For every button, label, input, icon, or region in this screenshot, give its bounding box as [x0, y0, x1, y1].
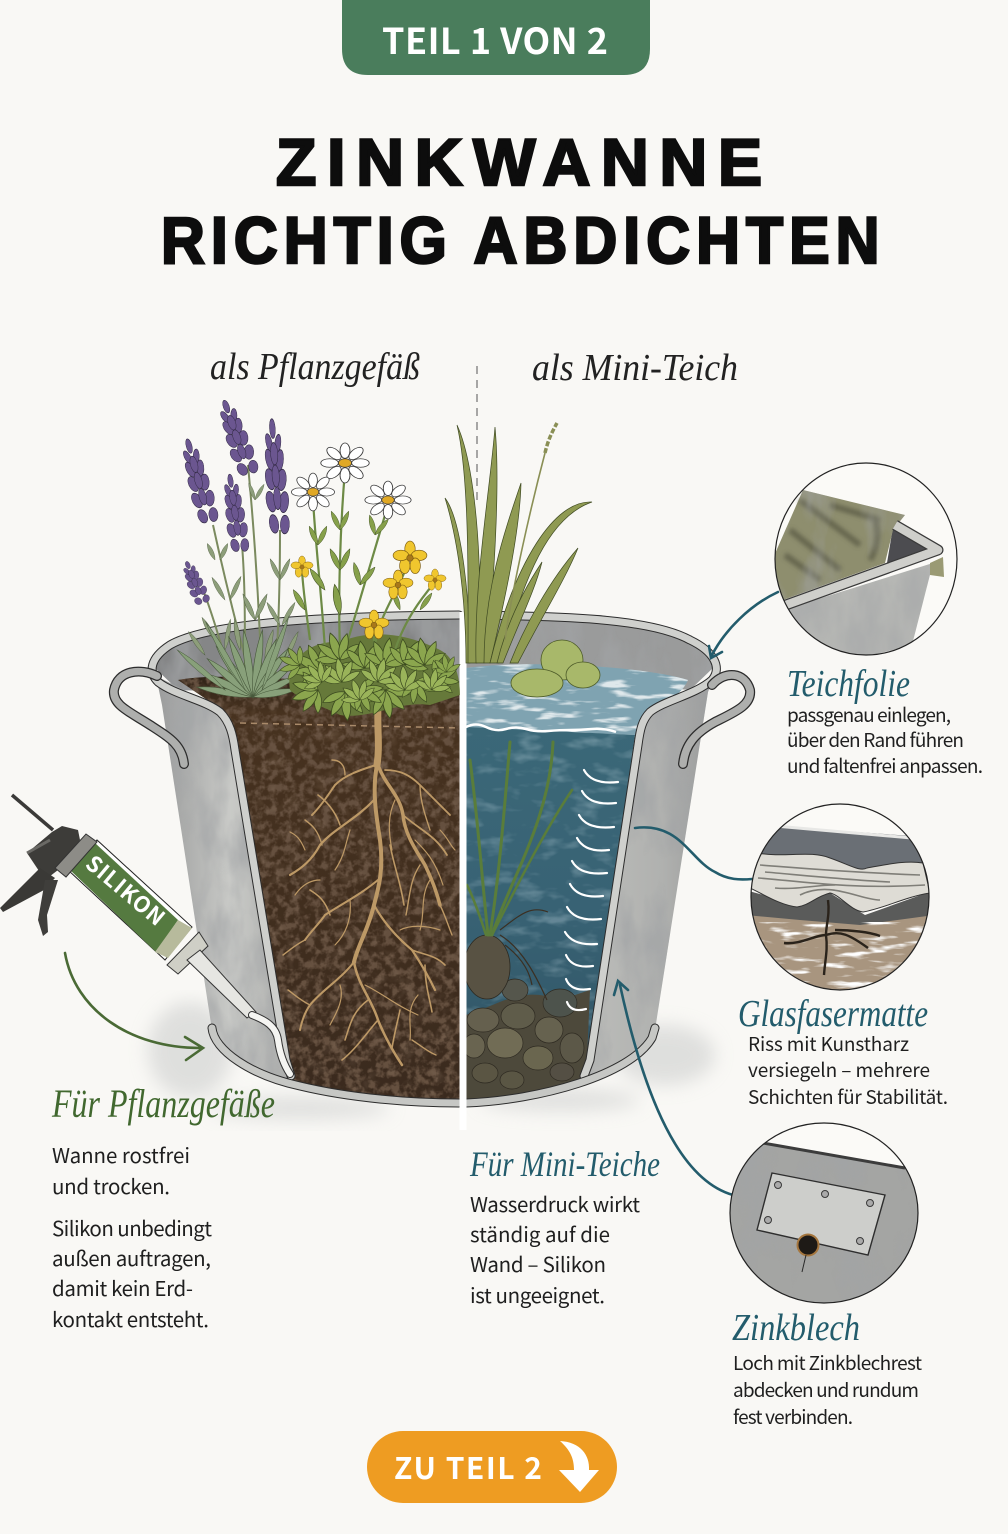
text block: Für Pflanzgefäße: damit kein Erd-: [52, 1272, 193, 1302]
cartridge: [55, 834, 208, 974]
tub outer walls: [158, 620, 709, 1078]
label: Glasfasermatte: [738, 993, 948, 1110]
label: Zinkblech: [732, 1307, 922, 1430]
plants: pond grass: [445, 425, 592, 663]
text block: Für Pflanzgefäße: Für Pflanzgefäße: [51, 1081, 275, 1126]
roots: [283, 706, 455, 1065]
text block: Für Pflanzgefäße: außen auftragen,: [52, 1242, 211, 1272]
inset: Teichfolie: [774, 462, 958, 656]
label: Glasfasermatte: Riss mit Kunstharz: [748, 1030, 909, 1057]
lily pads: [511, 640, 600, 697]
icon: down arrow: [559, 1441, 599, 1492]
text block: Für Pflanzgefäße: Wanne rostfrei: [52, 1139, 190, 1169]
title: RICHTIG ABDICHTEN: [161, 205, 880, 278]
plants: daisies and buttercups: [273, 443, 467, 723]
label: Glasfasermatte: Schichten für Stabilität.: [748, 1083, 948, 1110]
tub rim and cut edges: [152, 615, 716, 1103]
text block: Für Mini-Teiche: [469, 1144, 660, 1309]
ground shadow: [148, 1002, 715, 1119]
zinc tub cutaway illustration: [114, 600, 750, 1130]
title: ZINKWANNE: [276, 125, 762, 199]
arrow: Teichfolie: [709, 592, 778, 658]
text block: Für Mini-Teiche: ist ungeeignet.: [470, 1279, 605, 1309]
water pressure arcs: [565, 770, 618, 1010]
button: zu Teil 2: [367, 1431, 617, 1503]
text block: Für Pflanzgefäße: [51, 1081, 275, 1333]
nozzle and silicone bead: [187, 950, 290, 1074]
text block: Für Pflanzgefäße: und trocken.: [52, 1170, 170, 1200]
label: Teichfolie: [787, 663, 983, 779]
seed stem: [505, 423, 557, 640]
arrow: Glasfasermatte: [635, 827, 752, 879]
pebbles: [463, 979, 590, 1105]
label: Zinkblech: fest verbinden.: [733, 1403, 853, 1430]
handle left: [114, 672, 184, 764]
label: Zinkblech: Zinkblech: [732, 1307, 860, 1349]
water body: [466, 727, 635, 1098]
text block: Für Mini-Teiche: Wand – Silikon: [470, 1248, 606, 1278]
label: Zinkblech: abdecken und rundum: [733, 1376, 919, 1403]
cartridge: SILIKON: [80, 847, 173, 933]
text block: Für Pflanzgefäße: kontakt entsteht.: [52, 1303, 209, 1333]
caulk gun with silicone cartridge: [0, 795, 290, 1074]
right column heading: als Mini-Teich: [532, 347, 738, 389]
tub inner back wall: [152, 612, 716, 700]
label: Teichfolie: Teichfolie: [787, 663, 910, 705]
handle right: [683, 675, 750, 764]
badge: Teil 1 von 2: TEIL 1 VON 2: [382, 13, 608, 65]
text block: Für Pflanzgefäße: Silikon unbedingt: [52, 1212, 212, 1242]
button: zu Teil 2: ZU TEIL 2: [394, 1444, 542, 1488]
water surface: [466, 664, 688, 735]
label: Zinkblech: Loch mit Zinkblechrest: [733, 1349, 922, 1376]
label: Teichfolie: passgenau einlegen,: [787, 701, 951, 728]
plants: lavender: [174, 396, 300, 700]
center divider: [460, 612, 466, 1130]
text block: Für Mini-Teiche: Für Mini-Teiche: [469, 1144, 660, 1184]
text block: Für Mini-Teiche: ständig auf die: [470, 1218, 610, 1248]
text block: Für Mini-Teiche: Wasserdruck wirkt: [470, 1188, 640, 1218]
arrow: Zinkblech: [614, 981, 733, 1195]
inset: Glasfasermatte: [745, 800, 935, 995]
soil: [170, 670, 465, 1105]
label: Glasfasermatte: versiegeln – mehrere: [748, 1056, 930, 1083]
inset: Zinkblech: [729, 1122, 919, 1304]
submerged plant: [464, 742, 572, 1000]
title: [161, 125, 880, 278]
arrow: silicone: [65, 953, 203, 1060]
label: Teichfolie: und faltenfrei anpassen.: [787, 752, 983, 779]
gun body: [0, 795, 80, 936]
water wave line: [466, 724, 616, 732]
badge: Teil 1 von 2: [342, 0, 650, 75]
label: Teichfolie: über den Rand führen: [787, 726, 964, 753]
label: Glasfasermatte: Glasfasermatte: [738, 993, 928, 1035]
left column heading: als Pflanzgefäß: [210, 346, 420, 388]
